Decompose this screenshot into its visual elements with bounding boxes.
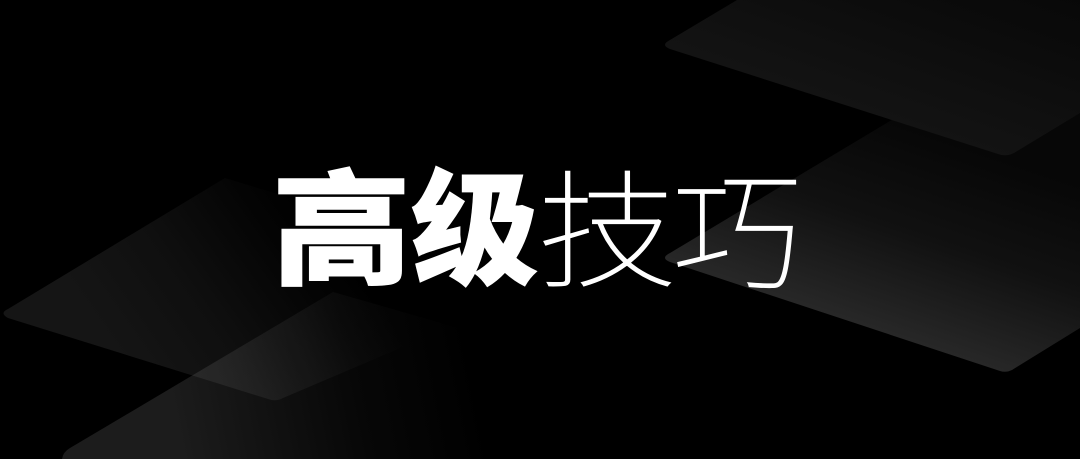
panel: upper left diamond	[4, 178, 560, 400]
title	[272, 162, 802, 308]
title: 级: 级	[411, 162, 538, 301]
panel: lower left diamond	[62, 292, 640, 459]
title: 巧: 巧	[672, 162, 802, 308]
panel: upper right diamond	[665, 0, 1080, 155]
title: 技: 技	[537, 163, 678, 305]
panel: lower right diamond	[665, 55, 1080, 372]
title: 高: 高	[272, 163, 412, 302]
